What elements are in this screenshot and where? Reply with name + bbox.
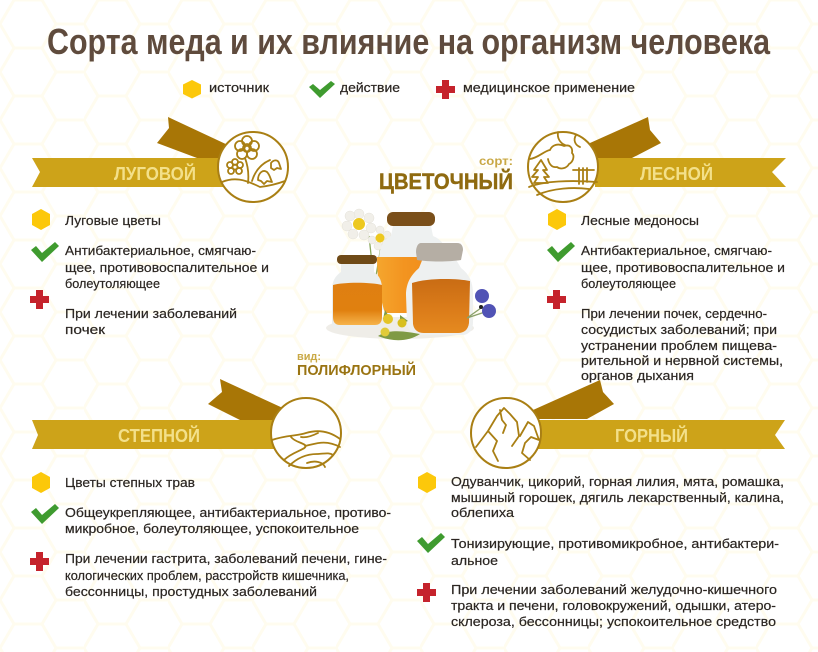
icon: cross bbox=[417, 583, 436, 602]
text: action: альное bbox=[451, 554, 498, 568]
center label: sort bbox=[379, 154, 513, 194]
panel: forest bbox=[528, 117, 786, 383]
ribbon: mountain: ГОРНЫЙ bbox=[615, 425, 688, 446]
text: medical: бессонницы, простудных заболеваний bbox=[65, 585, 317, 599]
icon: hexagon bbox=[548, 209, 566, 230]
center label: sort: сорт: bbox=[479, 154, 513, 168]
text: medical: сосудистых заболеваний; при bbox=[581, 323, 777, 337]
right jar bbox=[406, 243, 473, 335]
text: medical: При лечении заболеваний желудочно-кишечного bbox=[451, 583, 777, 597]
illustration: honey jars bbox=[326, 209, 496, 340]
center label: type: вид: bbox=[297, 351, 321, 363]
text: medical: склероза, бессонницы; успокоительное средство bbox=[451, 615, 776, 629]
icon: cross bbox=[30, 290, 49, 309]
ribbon: meadow bbox=[32, 117, 230, 187]
text: medical: При лечении гастрита, заболеваний печени, гине- bbox=[65, 552, 387, 566]
text: action: Тонизирующие, противомикробное, антибактери- bbox=[451, 537, 779, 551]
text: medical: почек bbox=[65, 323, 106, 337]
text: source: Луговые цветы bbox=[65, 214, 161, 228]
text: medical: устранении проблем пищева- bbox=[581, 339, 777, 353]
text: action: щее, противовоспалительное и bbox=[65, 261, 269, 275]
icon: forest bbox=[528, 132, 598, 202]
icon: cross bbox=[547, 290, 566, 309]
icon: check bbox=[547, 242, 575, 262]
panel: mountain bbox=[417, 380, 785, 629]
ribbon: steppe: СТЕПНОЙ bbox=[118, 425, 200, 446]
text: action: щее, противовоспалительное и bbox=[581, 261, 785, 275]
icon: cross bbox=[30, 552, 49, 571]
icon: hexagon bbox=[32, 209, 50, 230]
icon: hexagon bbox=[32, 472, 50, 493]
icon: steppe dunes bbox=[271, 398, 341, 468]
icon: check bbox=[417, 533, 445, 553]
legend: medical use: медицинское применение bbox=[463, 81, 635, 95]
center label: type bbox=[297, 351, 416, 379]
text: action: болеутоляющее bbox=[65, 277, 160, 291]
yellow flowers bbox=[378, 310, 420, 340]
legend: source bbox=[183, 80, 270, 98]
text: source: Одуванчик, цикорий, горная лилия, мята, ромашка, bbox=[451, 475, 784, 489]
text: source: мышиный горошек, дягиль лекарственный, калина, bbox=[451, 491, 784, 505]
ribbon: mountain bbox=[533, 380, 785, 449]
icon: hexagon bbox=[418, 472, 436, 493]
text: action: Антибактериальное, смягчаю- bbox=[65, 244, 256, 258]
text: source: облепиха bbox=[451, 506, 514, 520]
text: source: Лесные медоносы bbox=[581, 214, 699, 228]
blue flowers bbox=[467, 289, 496, 318]
panel: steppe bbox=[30, 379, 391, 599]
text: action: Антибактериальное, смягчаю- bbox=[581, 244, 772, 258]
legend bbox=[183, 80, 635, 99]
large jar bbox=[377, 212, 447, 313]
ribbon: forest: ЛЕСНОЙ bbox=[640, 163, 713, 184]
daisies bbox=[342, 209, 391, 282]
ribbon: forest bbox=[590, 117, 786, 187]
ribbon: steppe bbox=[32, 379, 285, 449]
text: medical: рительной и нервной системы, bbox=[581, 354, 783, 368]
text: action: микробное, болеутоляющее, успокоительное bbox=[65, 522, 359, 536]
text: action: болеутоляющее bbox=[581, 277, 676, 291]
legend: medical use bbox=[436, 80, 635, 99]
text: medical: кологических проблем, расстройств кишечника, bbox=[65, 569, 349, 583]
icon: flowers bbox=[218, 132, 288, 202]
center label: sort: ЦВЕТОЧНЫЙ bbox=[379, 169, 513, 194]
legend: action: действие bbox=[340, 81, 400, 95]
panel: meadow bbox=[30, 117, 288, 337]
center label: type: ПОЛИФЛОРНЫЙ bbox=[297, 361, 416, 379]
ribbon: meadow: ЛУГОВОЙ bbox=[114, 163, 196, 184]
text: source: Цветы степных трав bbox=[65, 476, 195, 490]
icon: check bbox=[31, 504, 59, 524]
icon: mountains bbox=[471, 398, 541, 468]
text: medical: тракта и печени, головокружений, одышки, атеро- bbox=[451, 599, 776, 613]
icon: check bbox=[31, 242, 59, 262]
left jar bbox=[332, 255, 382, 328]
legend: action bbox=[309, 81, 400, 98]
text: medical: При лечении почек, сердечно- bbox=[581, 307, 767, 321]
text: medical: При лечении заболеваний bbox=[65, 307, 237, 321]
legend: source: источник bbox=[209, 81, 270, 95]
text: medical: органов дыхания bbox=[581, 369, 694, 383]
text: action: Общеукрепляющее, антибактериальное, противо- bbox=[65, 506, 391, 520]
